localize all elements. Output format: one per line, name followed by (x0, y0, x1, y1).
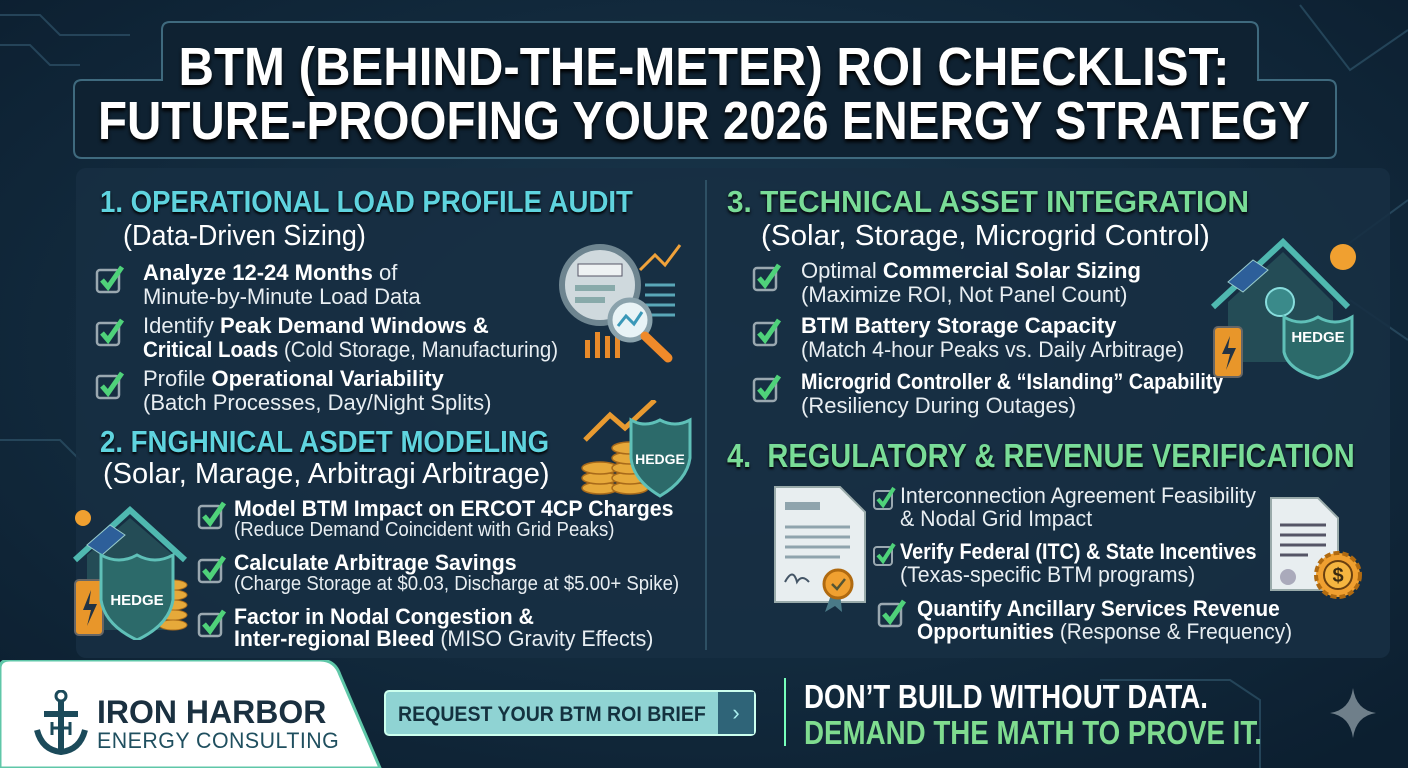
item 3.3: (Resiliency During Outages) (801, 393, 1076, 418)
item 1.1: Minute-by-Minute Load Data (143, 284, 421, 309)
icon: smart house with battery and hedge: HEDGE (1291, 329, 1345, 346)
item 2.2 (198, 550, 679, 595)
icon: sparkle (1330, 688, 1376, 738)
button: request brief (384, 690, 756, 736)
item 4.1 (873, 483, 1256, 531)
item 1.2 (96, 313, 558, 362)
panel: section 2: (Solar, Marage, Arbitragi Arbitrage) (103, 458, 549, 490)
icon: certificate document (774, 486, 866, 612)
item 4.3 (878, 596, 1292, 644)
button: request brief: › (732, 700, 740, 725)
item 2.3: Factor in Nodal Congestion & (234, 604, 534, 629)
title: FUTURE-PROOFING YOUR 2026 ENERGY STRATEGY (98, 91, 1310, 151)
icon: meter with magnifier (559, 244, 682, 362)
item 3.3: Microgrid Controller & “Islanding” Capability (801, 369, 1223, 394)
icon: house with battery and hedge: HEDGE (110, 592, 164, 609)
icon: smart house with battery and hedge (1211, 238, 1356, 380)
tagline (804, 678, 1262, 751)
icon: coins and hedge shield: HEDGE (635, 451, 685, 467)
logo text: IRON HARBOR (97, 694, 326, 730)
item 4.1: & Nodal Grid Impact (900, 506, 1092, 531)
item 2.2: (Charge Storage at $0.03, Discharge at $5.00+ Spike) (234, 573, 679, 595)
title box (73, 21, 1337, 159)
item 1.2: Identify Peak Demand Windows & (143, 313, 489, 338)
item 4.2: (Texas-specific BTM programs) (900, 562, 1195, 587)
item 3.2: (Match 4-hour Peaks vs. Daily Arbitrage) (801, 337, 1184, 362)
icon: document with dollar gear: $ (1332, 565, 1344, 587)
item 3.2: BTM Battery Storage Capacity (801, 313, 1116, 338)
item 4.2 (873, 539, 1257, 587)
item 4.3: Opportunities (Response & Frequency) (917, 619, 1292, 644)
item 2.1: (Reduce Demand Coincident with Grid Peaks) (234, 519, 614, 541)
tagline: DON’T BUILD WITHOUT DATA. (804, 678, 1208, 715)
item 1.3 (96, 366, 491, 415)
heading 3: 3. TECHNICAL ASSET INTEGRATION (727, 184, 1249, 219)
icon: house with battery and hedge (73, 506, 188, 640)
item 1.3: Profile Operational Variability (143, 366, 444, 391)
tagline: DEMAND THE MATH TO PROVE IT. (804, 714, 1262, 751)
title (98, 37, 1310, 151)
heading 1: 1. OPERATIONAL LOAD PROFILE AUDIT (100, 184, 633, 219)
icon: coins and hedge shield (581, 400, 692, 498)
item 3.1: Optimal Commercial Solar Sizing (801, 258, 1141, 283)
item 1.1: Analyze 12-24 Months of (143, 260, 397, 285)
item 4.3: Quantify Ancillary Services Revenue (917, 596, 1280, 621)
item 2.1 (198, 496, 674, 541)
item 2.1: Model BTM Impact on ERCOT 4CP Charges (234, 496, 674, 521)
item 4.2: Verify Federal (ITC) & State Incentives (900, 539, 1257, 564)
main panel (76, 168, 1390, 658)
item 3.2 (752, 313, 1184, 362)
icon: document with dollar gear (1270, 497, 1362, 599)
footer: logo panel (0, 660, 382, 768)
item 3.1: (Maximize ROI, Not Panel Count) (801, 282, 1127, 307)
item 1.2: Critical Loads (Cold Storage, Manufacturing) (143, 337, 558, 362)
panel: section 2 (100, 424, 679, 651)
footer: logo panel: ENERGY CONSULTING (97, 728, 339, 753)
icon: anchor (34, 690, 88, 755)
item 2.2: Calculate Arbitrage Savings (234, 550, 517, 575)
item 3.1 (752, 258, 1141, 307)
panel: section 3: (Solar, Storage, Microgrid Control) (761, 220, 1210, 252)
item 4.1: Interconnection Agreement Feasibility (900, 483, 1256, 508)
title: BTM (BEHIND-THE-METER) ROI CHECKLIST: (179, 37, 1229, 97)
panel: section 1: (Data-Driven Sizing) (123, 220, 366, 252)
heading 2: 2. FNGHNICAL ASDET MODELING (100, 424, 549, 459)
button: request brief: REQUEST YOUR BTM ROI BRIEF (398, 703, 706, 726)
item 1.3: (Batch Processes, Day/Night Splits) (143, 390, 491, 415)
panel: section 4 (726, 437, 1355, 644)
panel: section 1 (96, 184, 634, 415)
item 1.1 (96, 260, 421, 309)
item 2.3 (198, 604, 653, 651)
item 2.3: Inter-regional Bleed (MISO Gravity Effects) (234, 626, 653, 651)
item 3.3 (752, 369, 1223, 418)
panel: section 3 (726, 184, 1249, 418)
heading 4: 4. REGULATORY & REVENUE VERIFICATION (727, 437, 1355, 474)
